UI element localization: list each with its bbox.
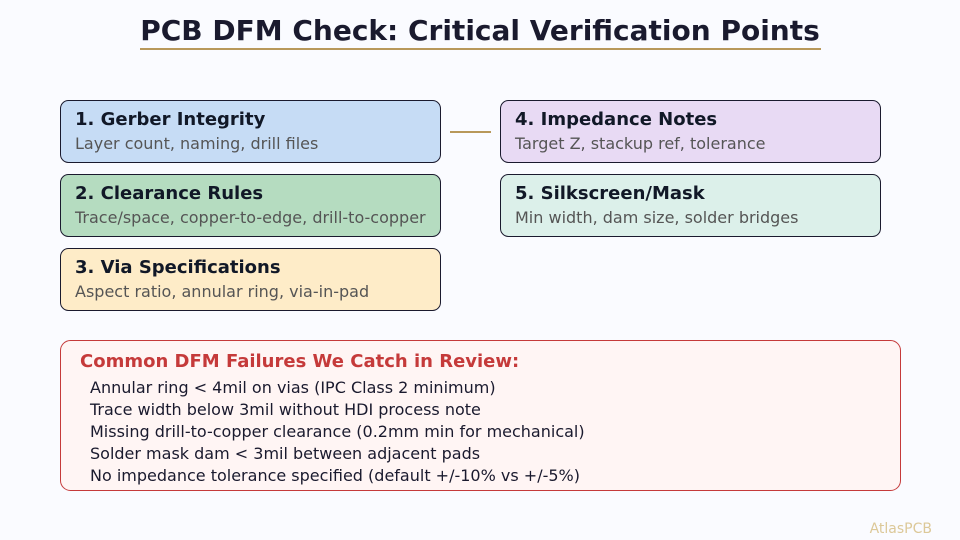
- panel: impedance notes: 4. Impedance Notes: [515, 109, 717, 130]
- connector line: [450, 131, 491, 133]
- watermark: AtlasPCB: [870, 521, 932, 537]
- panel: via specifications: [60, 248, 440, 310]
- panel: silkscreen mask: Min width, dam size, solder bridges: [515, 208, 798, 227]
- title: PCB DFM Check: Critical Verification Points: [140, 14, 820, 47]
- panel: common failures: Trace width below 3mil without HDI process note: [89, 400, 481, 419]
- panel: gerber integrity: 1. Gerber Integrity: [75, 109, 266, 130]
- panel: via specifications: 3. Via Specifications: [75, 257, 281, 278]
- panel: silkscreen mask: 5. Silkscreen/Mask: [515, 183, 706, 204]
- panel: via specifications: Aspect ratio, annular ring, via-in-pad: [75, 282, 369, 301]
- panel: gerber integrity: Layer count, naming, drill files: [75, 134, 318, 153]
- panel: common failures: Solder mask dam < 3mil between adjacent pads: [90, 444, 480, 463]
- panel: clearance rules: [60, 174, 440, 236]
- panel: common failures: Missing drill-to-copper clearance (0.2mm min for mechanical): [90, 422, 585, 441]
- panel: gerber integrity: [60, 100, 440, 162]
- panel: clearance rules: 2. Clearance Rules: [75, 183, 263, 204]
- panel: clearance rules: Trace/space, copper-to-edge, drill-to-copper: [74, 208, 426, 227]
- panel: common failures: No impedance tolerance specified (default +/-10% vs +/-5%): [90, 466, 580, 485]
- panel: impedance notes: Target Z, stackup ref, tolerance: [514, 134, 765, 153]
- panel: common failures: Common DFM Failures We Catch in Review:: [80, 351, 519, 372]
- panel: common failures: Annular ring < 4mil on vias (IPC Class 2 minimum): [90, 378, 496, 397]
- panel: silkscreen mask: [500, 174, 880, 236]
- panel: common failures: [60, 340, 900, 490]
- panel: impedance notes: [500, 100, 880, 162]
